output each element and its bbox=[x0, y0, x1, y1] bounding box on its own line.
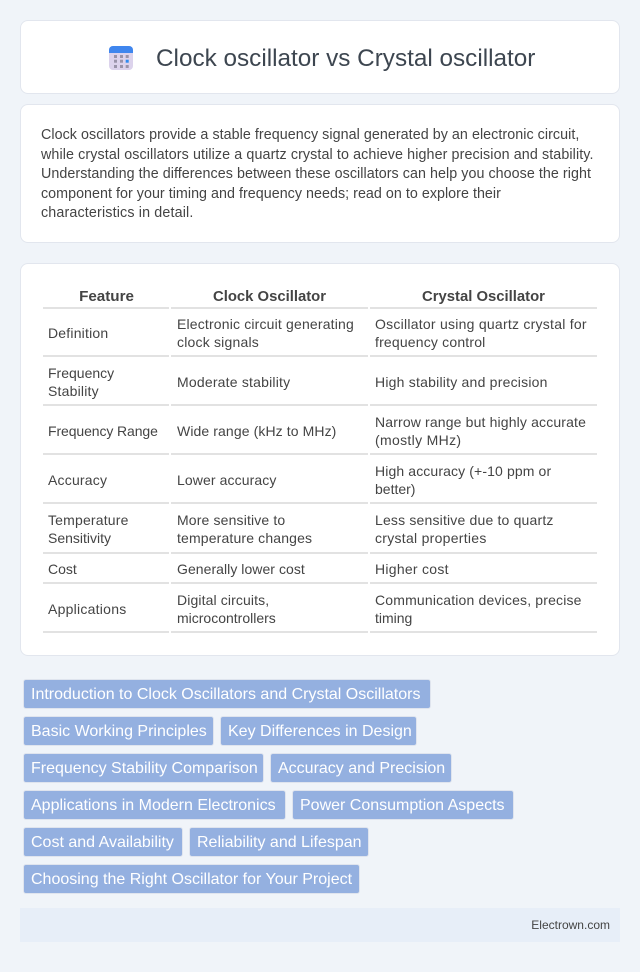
table rows: Less sensitive due to quartz bbox=[375, 512, 554, 528]
tag: Basic Working Principles bbox=[31, 723, 207, 740]
table rows: Communication devices, precise bbox=[375, 592, 582, 608]
tag bbox=[292, 790, 514, 820]
table headers bbox=[79, 288, 545, 305]
topic tags bbox=[23, 679, 514, 894]
tag bbox=[23, 753, 264, 783]
tag bbox=[23, 716, 214, 746]
table rows: frequency control bbox=[375, 334, 485, 350]
table rows: temperature changes bbox=[177, 530, 312, 546]
table rows: microcontrollers bbox=[177, 610, 276, 626]
icon: calendar bbox=[109, 46, 133, 70]
table rows: Stability bbox=[48, 383, 99, 399]
table rows: Lower accuracy bbox=[177, 472, 276, 488]
tag: Applications in Modern Electronics bbox=[31, 797, 276, 814]
table rows: Electronic circuit generating bbox=[177, 316, 354, 332]
table rows: Digital circuits, bbox=[177, 592, 269, 608]
intro paragraph: characteristics in detail. bbox=[41, 205, 194, 221]
table rows: clock signals bbox=[177, 334, 259, 350]
table rows: Applications bbox=[48, 601, 126, 617]
title: Clock oscillator vs Crystal oscillator bbox=[156, 45, 535, 72]
table rows bbox=[43, 307, 597, 633]
tag: Frequency Stability Comparison bbox=[31, 760, 258, 777]
intro paragraph bbox=[41, 127, 594, 221]
intro text panel bbox=[20, 104, 620, 243]
table headers: Feature bbox=[79, 288, 134, 305]
intro paragraph: Understanding the differences between these oscillators can help you choose the right bbox=[41, 166, 591, 182]
table rows: High accuracy (+-10 ppm or bbox=[375, 463, 551, 479]
intro paragraph: component for your timing and frequency needs; read on to explore their bbox=[41, 186, 501, 202]
table headers: Clock Oscillator bbox=[213, 289, 326, 305]
tag: Cost and Availability bbox=[31, 834, 174, 851]
table rows: Wide range (kHz to MHz) bbox=[177, 423, 336, 439]
tag: Key Differences in Design bbox=[228, 723, 412, 740]
table rows: Frequency Range bbox=[48, 423, 158, 439]
table rows: timing bbox=[375, 610, 412, 626]
tag bbox=[23, 679, 431, 709]
table rows: (mostly MHz) bbox=[375, 432, 461, 448]
footer bar bbox=[20, 908, 620, 942]
table rows: Narrow range but highly accurate bbox=[375, 414, 586, 430]
table rows: Frequency bbox=[48, 365, 114, 381]
table headers: Crystal Oscillator bbox=[422, 289, 545, 305]
table rows: More sensitive to bbox=[177, 512, 285, 528]
tag: Introduction to Clock Oscillators and Crystal Oscillators bbox=[31, 686, 420, 703]
table rows: better) bbox=[375, 481, 415, 497]
tag bbox=[270, 753, 452, 783]
table rows: Generally lower cost bbox=[177, 561, 305, 577]
tag: Power Consumption Aspects bbox=[300, 797, 505, 814]
table rows: Moderate stability bbox=[177, 374, 290, 390]
table rows: Definition bbox=[48, 325, 108, 341]
header card bbox=[20, 20, 620, 94]
table rows: Accuracy bbox=[48, 472, 107, 488]
table rows: Oscillator using quartz crystal for bbox=[375, 316, 587, 332]
tag bbox=[23, 827, 183, 857]
table rows: High stability and precision bbox=[375, 374, 548, 390]
tag: Reliability and Lifespan bbox=[197, 834, 362, 851]
table rows: Temperature bbox=[48, 512, 129, 528]
tag bbox=[189, 827, 369, 857]
footer text: Electrown.com bbox=[531, 918, 610, 932]
tag bbox=[23, 790, 286, 820]
table rows: Cost bbox=[48, 561, 77, 577]
comparison table panel bbox=[20, 263, 620, 656]
intro paragraph: Clock oscillators provide a stable frequency signal generated by an electronic circuit, bbox=[41, 127, 579, 143]
tag bbox=[220, 716, 417, 746]
table rows: crystal properties bbox=[375, 530, 487, 546]
tag: Choosing the Right Oscillator for Your Project bbox=[31, 871, 352, 888]
intro paragraph: while crystal oscillators utilize a quartz crystal to achieve higher precision and stability. bbox=[41, 146, 594, 162]
tag: Accuracy and Precision bbox=[278, 760, 445, 777]
table rows: Sensitivity bbox=[48, 530, 111, 546]
tag bbox=[23, 864, 360, 894]
table rows: Higher cost bbox=[375, 561, 449, 577]
